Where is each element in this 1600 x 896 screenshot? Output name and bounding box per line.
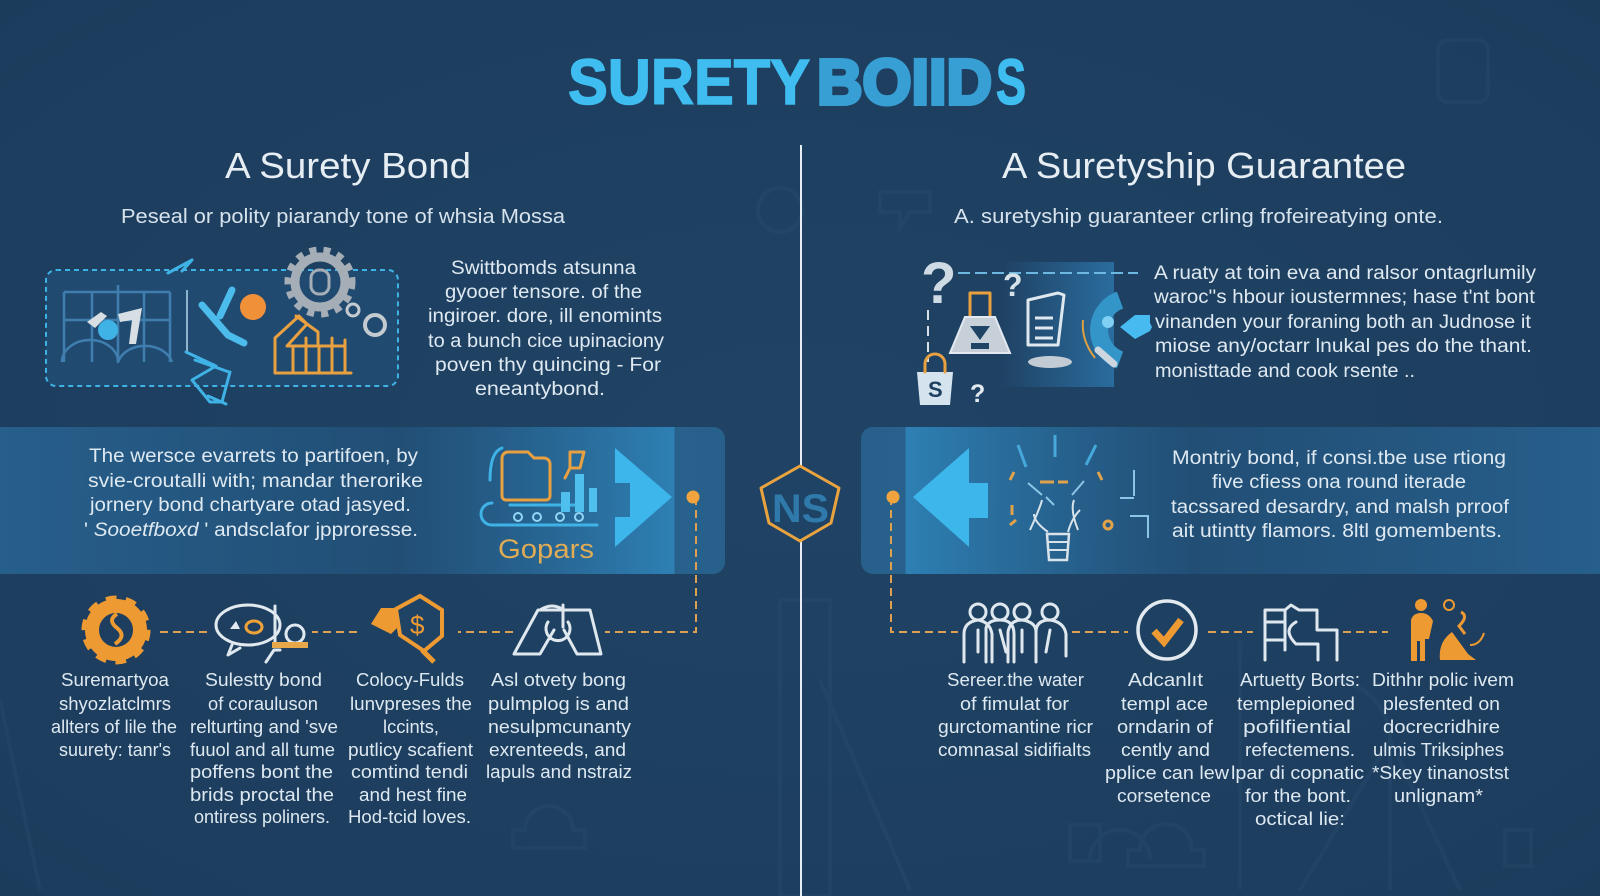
text: step 2: of corauluson [208, 694, 318, 714]
label: Gopars: Gopars [498, 534, 594, 564]
text: step 3: Colocy-Fulds [356, 670, 464, 690]
text: left band copy: ' Sooetfboxd ' andsclafor jpproresse. [84, 520, 418, 541]
text: step 3: lccints, [383, 717, 439, 737]
text: surety bond description: eneantybond. [475, 379, 605, 400]
title: S [996, 46, 1026, 118]
connector: left timeline [156, 490, 700, 632]
text: step 2: fuuol and all tume [190, 740, 335, 760]
text: step 1 [51, 670, 177, 760]
text: guarantee step 2 [1105, 670, 1230, 806]
text: guarantee step 3: templepioned [1237, 694, 1355, 714]
text: guarantee step 1: of fimulat for [960, 694, 1069, 714]
icon: tag with magnifier [371, 596, 442, 662]
icon: orange factory [275, 316, 351, 373]
icon: open book [62, 285, 172, 363]
text: surety bond description [428, 258, 665, 400]
icon: folders and conveyor chart [481, 448, 597, 525]
text: step 2: Sulestty bond [205, 670, 322, 690]
text: guarantee step 1 [938, 670, 1093, 760]
text: right band copy [1171, 448, 1510, 542]
text: right band copy: ait utintty flamors. 8ltl gomembents. [1172, 521, 1502, 542]
text: step 2: poffens bont the [190, 762, 333, 782]
text: step 1: shyozlatclmrs [59, 694, 171, 714]
text: left band copy: jornery bond chartyare otad jasyed. [89, 495, 411, 516]
icon: tag with magnifier: $ [410, 610, 425, 640]
icon: document with hand [1265, 605, 1337, 660]
text: step 4: lapuls and nstraiz [486, 762, 632, 782]
text: guarantee step 3: octical lie: [1255, 809, 1345, 829]
text: guarantee step 4: ulmis Triksiphes [1373, 740, 1504, 760]
text: guarantee step 4 [1372, 670, 1514, 806]
text: guarantee step 3 [1231, 670, 1364, 829]
text: step 3: and hest fine [359, 785, 467, 805]
right heading: A Suretyship Guarantee [1002, 145, 1406, 186]
icon: shopping bag: S [928, 377, 943, 402]
text: step 4: nesulpmcunanty [488, 717, 631, 737]
panel: surety bond illustration [46, 250, 398, 404]
text: guarantee step 2: cently and [1121, 740, 1210, 760]
text: surety bond description: gyooer tensore. of the [445, 282, 642, 303]
connector: right timeline [886, 490, 1388, 632]
icon: orange gear [86, 600, 146, 660]
text: guarantee step 2: templ ace [1121, 694, 1208, 714]
arrow: left [913, 448, 988, 547]
text: guarantee step 3: Artuetty Borts: [1240, 670, 1360, 690]
text: guarantee step 2: Adcanlıt [1128, 670, 1203, 690]
text: suretyship description: miose any/octarr lnukal pes do the thant. [1155, 336, 1532, 357]
icon: blue C gauge [1083, 300, 1120, 364]
icon: large question mark: ? [921, 251, 956, 316]
icon: question mark near bag: ? [970, 380, 985, 408]
text: step 3: Hod-tcid loves. [348, 807, 471, 827]
text: step 1: allters of lile the [51, 717, 177, 737]
left band [0, 427, 725, 574]
text: surety bond description: Swittbomds atsunna [451, 258, 636, 279]
arrow: right [615, 448, 672, 547]
text: guarantee step 1: Sereer.the water [947, 670, 1084, 690]
icon: group of people [964, 604, 1066, 662]
text: suretyship description: monisttade and cook rsente .. [1155, 361, 1415, 382]
text: right band copy: five cfiess ona round iterade [1212, 472, 1466, 493]
icon: speech bubbles [216, 605, 308, 662]
icon: shopping bag [917, 354, 953, 405]
left heading: A Surety Bond [225, 145, 471, 186]
text: left band copy [84, 446, 423, 541]
text: suretyship description [1153, 263, 1537, 382]
text: step 4: pulmplog is and [488, 694, 629, 714]
text: surety bond description: ingiroer. dore, ill enomints [428, 306, 662, 327]
panel: suretyship illustration [917, 251, 1152, 408]
text: step 3: lunvpreses the [350, 694, 472, 714]
text: step 2 [190, 670, 338, 827]
text: guarantee step 4: docrecridhire [1383, 717, 1500, 737]
text: guarantee step 2: pplice can lew [1105, 763, 1230, 783]
text: guarantee step 2: orndarin of [1117, 717, 1214, 737]
icon: handshake [514, 605, 601, 654]
text: surety bond description: to a bunch cice upinaciony [428, 331, 665, 352]
text: guarantee step 1: gurctomantine ricr [938, 717, 1093, 737]
text: left band copy: svie-croutalli with; mandar therorike [88, 471, 423, 492]
text: step 1: Suremaгtyoa [61, 670, 170, 690]
icon: blue zigzag line [168, 260, 230, 404]
text: guarantee step 1: comnasal sidifialts [938, 740, 1091, 760]
icon: orange figures [1411, 599, 1484, 661]
text: guarantee step 3: for the bont. [1245, 786, 1351, 806]
text: step 4: Asl otvety bong [491, 670, 626, 690]
center divider [800, 145, 802, 896]
text: guarantee step 2: corsetence [1117, 786, 1211, 806]
title [568, 46, 1026, 118]
text: step 3: putlicy scafient [348, 740, 473, 760]
text: step 2: ontiress poliners. [194, 807, 330, 827]
icon: flask [950, 293, 1010, 353]
text: step 4: exrenteeds, and [489, 740, 626, 760]
text: step 3 [348, 670, 473, 827]
text: surety bond description: poven thy quincing - For [435, 355, 662, 376]
icon: grey gear [288, 250, 385, 335]
icon: blue diamond arrow [1120, 315, 1152, 339]
text: step 4 [486, 670, 632, 782]
text: step 2: relturting and 'sve [190, 717, 338, 737]
text: guarantee step 3: lpar di copnatic [1231, 763, 1364, 783]
text: step 3: comtind tendi [351, 762, 468, 782]
text: right band copy: Montriy bond, if consi.tbe use rtiong [1172, 448, 1506, 469]
right band [861, 427, 1600, 574]
seal: NS hexagon [761, 466, 839, 541]
icon: document on stand [1028, 293, 1072, 368]
text: guarantee step 4: unlignam* [1394, 786, 1483, 806]
seal: NS hexagon: NS [772, 487, 829, 531]
text: step 2: brids proctal the [190, 785, 334, 805]
text: guarantee step 4: *Skey tinanostst [1372, 763, 1509, 783]
title: BOIID [817, 46, 992, 118]
text: guarantee step 3: pofilfiential [1243, 717, 1351, 737]
text: suretyship description: A ruaty at toin eva and ralsor ontagrlumily [1154, 263, 1537, 284]
title: SURETY [568, 46, 810, 118]
text: left band copy: The wersce evarrets to partifoen, by [89, 446, 419, 467]
icon: blue branch and orange dot [187, 290, 266, 352]
text: guarantee step 4: Dithhr polic ivem [1372, 670, 1514, 690]
icon: light bulb with sparks [1010, 435, 1148, 560]
left subtitle: Pesеal or polity piarandy tone of whsia Mossa [121, 206, 566, 228]
icon: small question mark: ? [1003, 267, 1023, 303]
text: suretyship description: waroc''s hbour ioustermnes; hase t'nt bont [1153, 287, 1536, 308]
icon: check circle [1138, 601, 1196, 659]
text: suretyship description: vinanden your foraning both an Judnose it [1155, 312, 1532, 333]
text: guarantee step 3: refectemens. [1245, 740, 1355, 760]
text: guarantee step 4: plesfented on [1383, 694, 1500, 714]
text: right band copy: tacssared desardry, and malsh prroof [1171, 497, 1510, 518]
right subtitle: A. suretyship guaranteer crling frofeireatying onte. [954, 206, 1443, 228]
text: step 1: suurety: tanr's [59, 740, 171, 760]
